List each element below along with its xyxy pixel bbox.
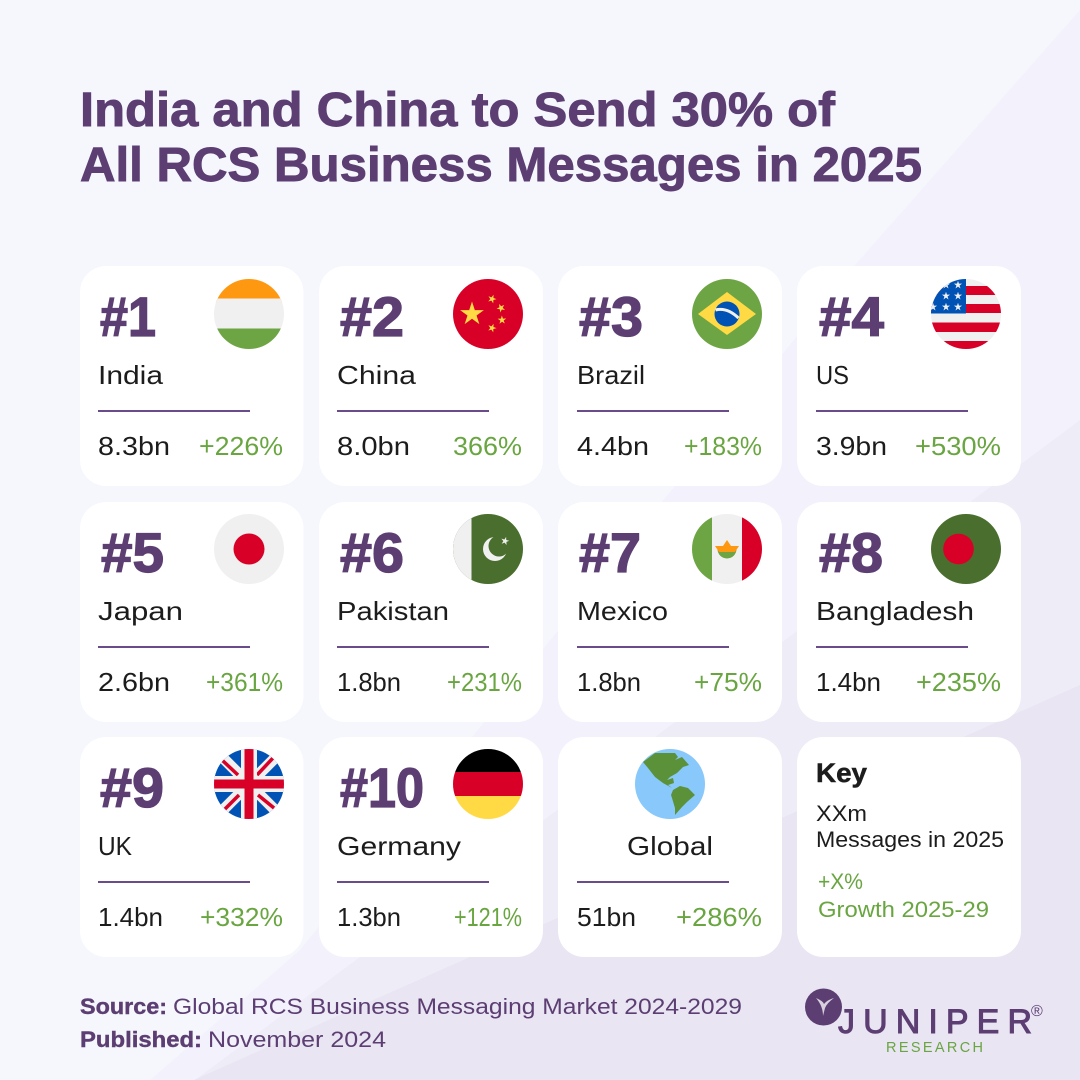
messages: 51bn [577, 902, 636, 932]
icon: Pakistan flag [453, 514, 523, 584]
country name: Global [627, 831, 713, 861]
messages: 8.3bn [98, 431, 170, 461]
rank: #7: #7 [579, 521, 641, 584]
country name: Bangladesh [816, 596, 974, 626]
messages: 3.9bn [816, 431, 887, 461]
icon: India flag [214, 279, 284, 350]
country name: China [337, 360, 417, 390]
rank: #3: #3 [579, 285, 643, 348]
panel: UK [80, 737, 304, 957]
panel: Mexico [558, 502, 782, 722]
key: growth: +X% [818, 869, 863, 894]
growth: +235% [916, 667, 1001, 697]
icon: Germany flag [453, 749, 523, 819]
growth: +226% [199, 431, 283, 461]
rank: #5: #5 [101, 521, 164, 584]
rank: #2: #2 [340, 285, 404, 348]
rank: #6: #6 [340, 521, 404, 584]
published line [80, 1027, 386, 1052]
panel: Pakistan [319, 502, 543, 722]
messages: 2.6bn [98, 667, 170, 697]
messages: 1.8bn [577, 667, 641, 697]
panel: Brazil [558, 266, 782, 486]
logo: Juniper Research: ® [1031, 1003, 1043, 1020]
key: messages [816, 801, 1004, 852]
country name: Japan [98, 596, 183, 626]
published line: Published: [80, 1027, 202, 1052]
key: growth: Growth 2025-29 [818, 897, 989, 922]
icon: China flag [453, 279, 523, 349]
growth: +121% [454, 902, 522, 932]
logo: Juniper Research [805, 988, 1043, 1056]
key: growth [818, 869, 989, 922]
panel: India [80, 266, 304, 486]
growth: +332% [200, 902, 283, 932]
panel: key [797, 737, 1021, 957]
icon: Brazil flag [692, 279, 762, 349]
growth: +530% [915, 431, 1001, 461]
messages: 1.4bn [98, 902, 163, 932]
published line: November 2024 [208, 1027, 386, 1052]
key: messages: XXm [816, 801, 867, 826]
rank: #8: #8 [819, 521, 883, 584]
messages: 4.4bn [577, 431, 649, 461]
country name: US [816, 360, 849, 390]
icon: Bangladesh flag [931, 514, 1001, 584]
country name: Germany [337, 831, 461, 861]
title: All RCS Business Messages in 2025 [80, 139, 922, 192]
country name: India [98, 360, 164, 390]
country name: Pakistan [337, 596, 449, 626]
source line: Source: [80, 994, 167, 1019]
key: messages: Messages in 2025 [816, 827, 1004, 852]
rank: #9: #9 [100, 756, 164, 819]
source line: Global RCS Business Messaging Market 2024-2029 [173, 994, 742, 1019]
panel: US [797, 266, 1021, 486]
panel: Bangladesh [797, 502, 1021, 722]
rank: #1: #1 [100, 285, 156, 348]
growth: +361% [206, 667, 283, 697]
messages: 1.3bn [337, 902, 401, 932]
messages: 1.4bn [816, 667, 881, 697]
title [80, 84, 922, 192]
icon: Mexico flag [692, 514, 762, 584]
growth: 366% [453, 431, 522, 461]
growth: +183% [684, 431, 762, 461]
messages: 8.0bn [337, 431, 410, 461]
growth: +286% [676, 902, 762, 932]
rank: #4: #4 [819, 285, 884, 348]
growth: +231% [447, 667, 522, 697]
title: India and China to Send 30% of [80, 84, 836, 137]
rank: #10: #10 [340, 756, 424, 819]
panel: Japan [80, 502, 304, 722]
icon: Japan flag [214, 514, 284, 584]
icon: US flag [929, 279, 1001, 350]
panel: Global [558, 737, 782, 957]
icon: UK flag [214, 749, 284, 819]
panel: China [319, 266, 543, 486]
key heading: Key [816, 758, 867, 788]
growth: +75% [694, 667, 762, 697]
logo: Juniper Research: JUNIPER [838, 1003, 1032, 1041]
icon: globe [635, 749, 705, 819]
logo: Juniper Research: RESEARCH [886, 1040, 983, 1056]
country name: Brazil [577, 360, 645, 390]
country name: UK [98, 831, 133, 861]
panel: Germany [319, 737, 543, 957]
messages: 1.8bn [337, 667, 401, 697]
country name: Mexico [577, 596, 668, 626]
